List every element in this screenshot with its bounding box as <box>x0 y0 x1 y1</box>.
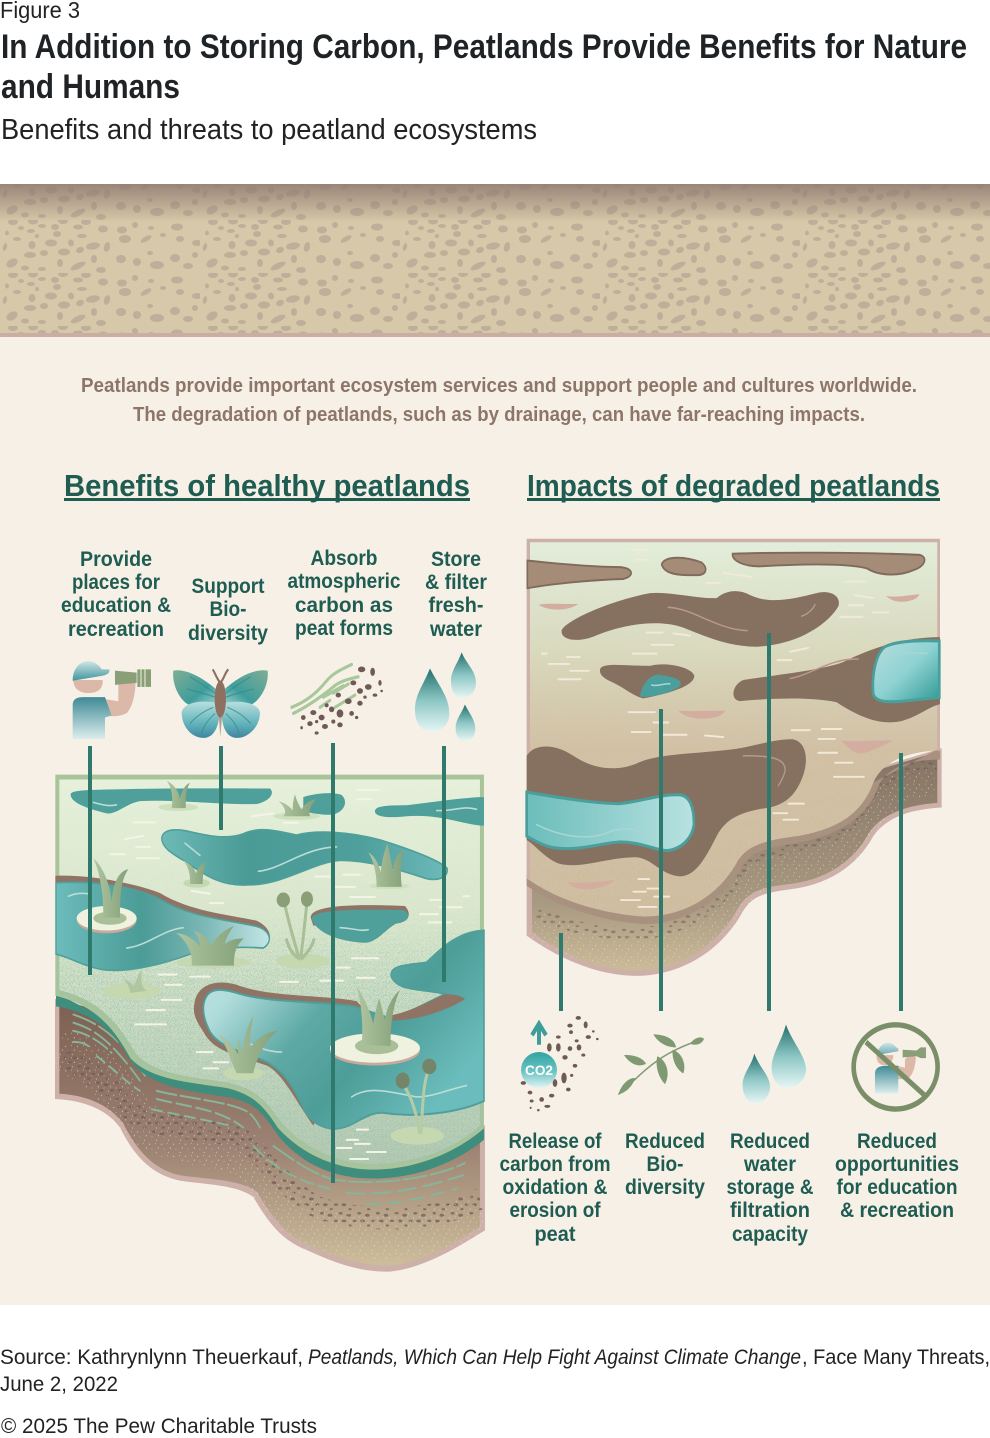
label: reduced opportunities: for education <box>836 1176 958 1199</box>
copyright: © 2025 The Pew Charitable Trusts <box>1 1415 317 1438</box>
label: biodiversity: Bio- <box>210 598 246 621</box>
degraded peatland illustration <box>521 539 942 1111</box>
label: freshwater <box>425 548 487 641</box>
soil layer <box>527 748 942 976</box>
label: biodiversity <box>188 575 268 645</box>
label: biodiversity: Support <box>192 575 265 598</box>
intro text <box>81 375 917 426</box>
grass tufts <box>93 781 409 1073</box>
label: absorb carbon <box>288 547 401 640</box>
icon: CO2 bubble: CO2 <box>525 1062 553 1078</box>
label: reduced opportunities: Reduced <box>857 1130 937 1153</box>
label: reduced water storage: storage & <box>726 1176 814 1199</box>
icon: no recreation <box>854 1025 938 1109</box>
icon: reduced water drops <box>743 1024 806 1103</box>
label: reduced water storage: capacity <box>732 1223 808 1246</box>
surface highlight strokes <box>68 790 477 1159</box>
degraded surface <box>527 539 940 924</box>
label: reduced water storage: filtration <box>730 1199 810 1222</box>
peat surface <box>55 775 485 1185</box>
label: release of carbon: erosion of <box>510 1199 601 1222</box>
pond: upper right <box>375 797 484 826</box>
cattails <box>276 891 444 1145</box>
label: reduced biodiversity: Reduced <box>625 1130 705 1153</box>
label: release of carbon: Release of <box>508 1130 602 1153</box>
label: freshwater: Store <box>431 548 481 571</box>
label: absorb carbon: atmospheric <box>288 570 401 593</box>
pond: upper small <box>303 793 345 815</box>
label: release of carbon: oxidation & <box>502 1176 608 1199</box>
subtitle: Benefits and threats to peatland ecosystems <box>1 114 537 146</box>
label: reduced biodiversity: diversity <box>625 1176 705 1199</box>
source note: Peatlands, Which Can Help Fight Against Climate Change <box>308 1346 801 1369</box>
source note <box>0 1346 990 1396</box>
icon: butterfly <box>173 669 268 738</box>
icon: person with binoculars <box>73 661 151 739</box>
label: education and recreation: Provide <box>80 548 152 571</box>
label: reduced opportunities: opportunities <box>835 1153 959 1176</box>
water table band <box>56 993 484 1179</box>
pond: upper left <box>71 788 272 813</box>
healthy peatland illustration <box>55 652 485 1272</box>
source note: June 2, 2022 <box>0 1373 118 1396</box>
pond: large lower <box>194 930 484 1129</box>
connector lines: benefits <box>88 743 446 1183</box>
label: release of carbon <box>500 1130 610 1246</box>
label: reduced opportunities: & recreation <box>840 1199 954 1222</box>
connector lines: impacts <box>559 633 903 1011</box>
icon: leafy branch <box>618 1034 704 1094</box>
brown bare patches <box>527 553 940 876</box>
title: and Humans <box>1 68 180 106</box>
icon: water drops <box>415 652 476 741</box>
label: reduced water storage <box>726 1130 814 1246</box>
label: biodiversity: diversity <box>188 622 268 645</box>
label: education and recreation: recreation <box>68 618 164 641</box>
pond: middle <box>162 830 447 885</box>
label: freshwater: & filter <box>425 571 487 594</box>
intro text: The degradation of peatlands, such as by drainage, can have far-reaching impacts. <box>133 404 865 426</box>
label: reduced water storage: Reduced <box>730 1130 810 1153</box>
icon: CO2 release flecks <box>521 1016 599 1111</box>
label: release of carbon: carbon from <box>500 1153 610 1176</box>
remnant ponds <box>527 641 939 851</box>
label: reduced biodiversity <box>625 1130 705 1199</box>
label: absorb carbon: carbon as <box>295 594 393 617</box>
pink streaks and highlights <box>537 550 927 907</box>
pond: small with shore <box>311 905 409 943</box>
label: reduced water storage: water <box>743 1153 796 1176</box>
label: education and recreation <box>61 548 171 641</box>
icon: peat forming <box>292 664 383 735</box>
pond: left with shore <box>55 876 270 970</box>
label: reduced opportunities <box>835 1130 959 1222</box>
label: absorb carbon: Absorb <box>310 547 378 570</box>
label: absorb carbon: peat forms <box>295 617 393 640</box>
label: freshwater: fresh- <box>428 594 484 617</box>
label: reduced biodiversity: Bio- <box>646 1153 684 1176</box>
label: education and recreation: places for <box>72 571 160 594</box>
source note: Source: Kathrynlynn Theuerkauf, <box>0 1346 303 1369</box>
panel: peat texture band <box>0 184 990 337</box>
soil layer <box>55 999 485 1272</box>
label: freshwater: water <box>429 618 482 641</box>
icon: CO2 bubble <box>521 1052 557 1088</box>
heading: impacts: Impacts of degraded peatlands <box>527 468 940 503</box>
label: education and recreation: education & <box>61 594 171 617</box>
intro text: Peatlands provide important ecosystem services and support people and cultures worldwide. <box>81 375 917 397</box>
label: release of carbon: peat <box>534 1223 576 1246</box>
panel: background <box>0 337 990 1305</box>
heading: benefits: Benefits of healthy peatlands <box>64 468 470 503</box>
title <box>1 28 967 106</box>
